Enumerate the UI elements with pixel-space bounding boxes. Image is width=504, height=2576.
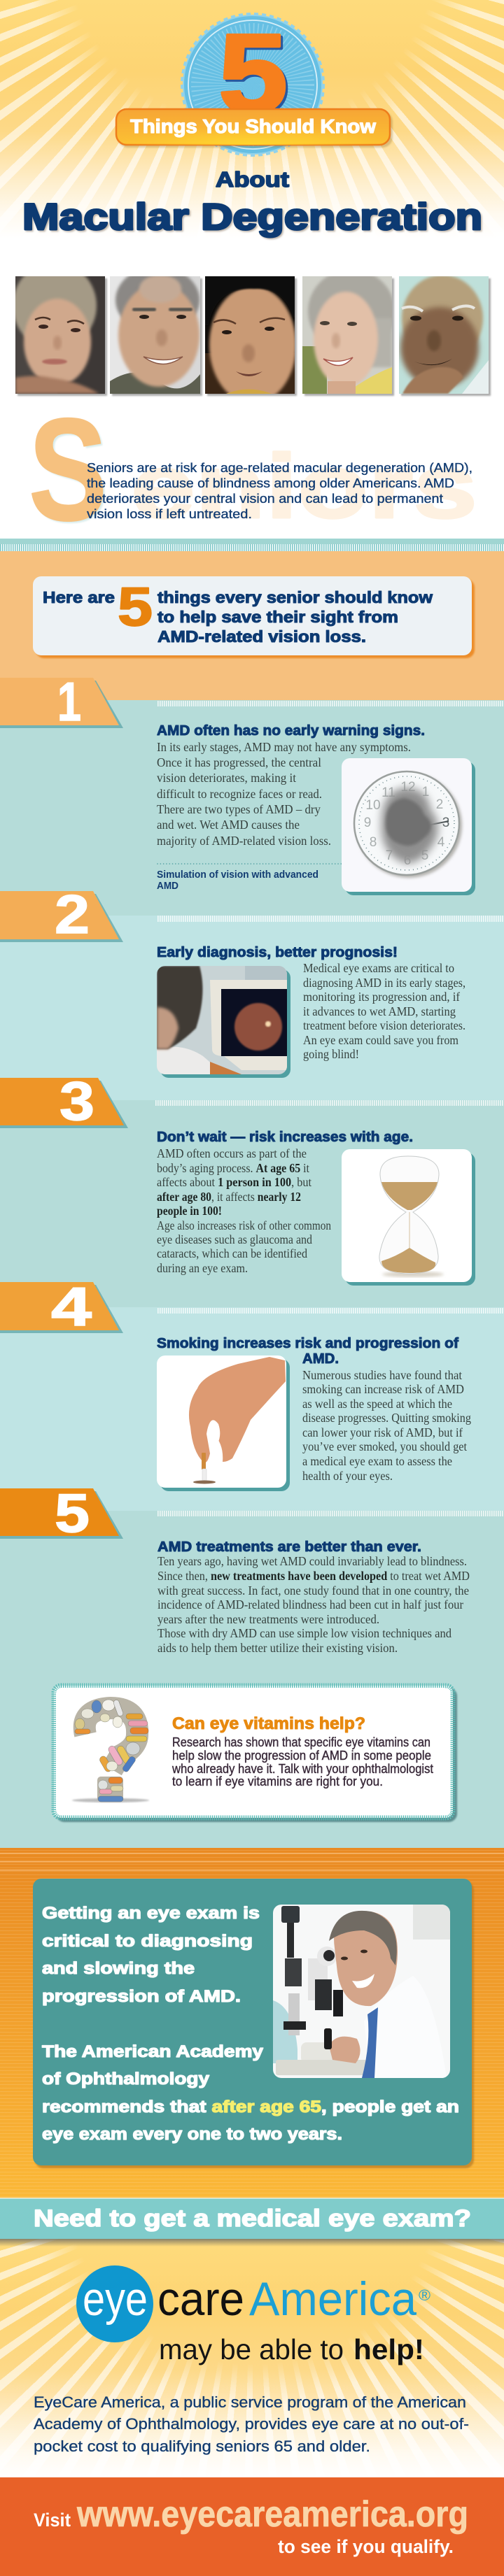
section 3: body: cataracts, which can be identified [157,1246,307,1260]
section 5: body: incidence of AMD-related blindness had been cut in half just four [158,1597,463,1611]
vitamins body [172,1735,433,1788]
eyecare description [34,2393,469,2455]
panel: teal exam card: and slowing the [42,1959,195,1978]
section 3: body: eye diseases such as glaucoma and [157,1232,312,1246]
title: macular degeneration: Macular Degeneration [24,198,484,239]
section 4: body: you’ve ever smoked, you should get [302,1439,467,1453]
big number 5: 5 [218,10,288,136]
image: clock with central vision loss [342,758,475,895]
section 4: body [302,1368,471,1483]
big number 5: 5 [220,13,290,138]
section 4: body: a medical eye exam to assess the [302,1454,452,1468]
section 2: body: treatment before vision deteriorates. [303,1018,465,1032]
section 2 tab: 2 [55,883,90,945]
section 5: body: Since then, new treatments have been developed to treat wet AMD [158,1569,470,1583]
vitamins body: to learn if eye vitamins are right for you. [172,1774,383,1788]
logo: eyecare america [76,2265,430,2342]
intro text: deteriorates your central vision and can lead to permanent [87,492,443,506]
image: eye doctor with slit lamp [273,1905,450,2078]
logo: eyecare america: America [249,2272,416,2326]
callout: here are 5 things: things every senior should know [158,588,433,606]
panel: footer visit website: www.eyecareamerica.org [76,2494,468,2535]
badge: blue seal [183,15,323,155]
section 1: body: and wet. Wet AMD causes the [157,818,300,832]
seniors watermark: S [31,391,109,553]
section 5: body: Ten years ago, having wet AMD could invariably lead to blindness. [158,1554,467,1568]
intro text: vision loss if left untreated. [87,507,252,521]
section 3: body: AMD often occurs as part of the [157,1146,307,1160]
banner: need a medical eye exam [0,2198,504,2247]
image: clock with central vision loss: 9 [364,816,371,830]
section 1: body: Once it has progressed, the central [157,755,321,769]
seniors watermark: eniors [131,435,477,537]
eyecare description: pocket cost to qualifying seniors 65 and older. [34,2438,370,2455]
section 3: body: body’s aging process. At age 65 it [157,1161,309,1175]
image: clock with central vision loss: 11 [382,785,396,800]
section 5: heading: AMD treatments are better than ever. [158,1539,421,1555]
photo: older woman with dark hair [205,276,297,404]
photo: smiling man [110,266,202,396]
intro text: Seniors are at risk for age-related macular degeneration (AMD), [87,461,472,475]
section 4: body: Numerous studies have found that [302,1368,462,1382]
section 4: body: disease progresses. Quitting smoking [302,1411,471,1425]
section 2: body: Medical eye exams are critical to [303,961,454,975]
section 2 tab [0,883,123,945]
seniors watermark [29,389,477,553]
image: hourglass [342,1149,475,1286]
panel: teal exam card: critical to diagnosing [42,1932,253,1951]
panel: footer visit website: Visit [34,2510,71,2531]
image: clock with central vision loss: 5 [421,848,428,863]
image: clock with central vision loss: 3 [442,816,449,830]
section 1: body: In its early stages, AMD may not have any symptoms. [157,740,411,754]
panel: footer visit website: to see if you qualify. [278,2536,454,2557]
logo: eyecare america: eye [83,2272,148,2326]
panel: teal exam card: The American Academy [42,2042,264,2061]
section 4: heading [157,1336,458,1367]
vitamins body: Research has shown that specific eye vitamins can [172,1735,430,1749]
panel: teal exam card [33,1879,474,2168]
callout: here are 5 things: AMD-related vision loss. [158,627,366,646]
section 2: body [303,961,465,1061]
tagline: may be able to help: help! [354,2333,424,2365]
section 4: body: can lower your risk of AMD, but if [302,1425,463,1439]
logo: eyecare america: care [158,2272,244,2326]
vitamins body: help slow the progression of AMD in some people [172,1749,431,1763]
banner: need a medical eye exam: Need to get a medical eye exam? [34,2205,471,2232]
section 1: caption: AMD [157,880,178,892]
section 4: body: health of your eyes. [302,1469,393,1483]
intro text: the leading cause of blindness among older Americans. AMD [87,476,454,490]
section 1: caption: Simulation of vision with advanced [157,869,318,881]
image: clock with central vision loss: 8 [370,835,377,850]
logo: eyecare america: ® [419,2286,430,2304]
section 1: body: majority of AMD-related vision loss. [157,834,331,848]
section 5: body: with great success. In fact, one study found that in one country, the [158,1584,469,1597]
title: macular degeneration: Macular Degeneration [22,197,482,238]
eyecare description: Academy of Ophthalmology, provides eye care at no out-of- [34,2415,469,2433]
vitamins body: who already have it. Talk with your ophthalmologist [172,1762,433,1776]
section 2: body: it advances to wet AMD, starting [303,1004,456,1018]
section 3: body: during an eye exam. [157,1261,248,1275]
panel: teal exam card: recommends that after age 65 , people get an [42,2098,459,2116]
section 4: heading: AMD. [302,1351,339,1367]
section 1 tab: 1 [57,671,81,732]
panel: orange intro [0,539,504,701]
panel: orange exam section [0,1848,504,2198]
section 5 tab [0,1482,123,1544]
section 5: body: aids to help them better utilize their existing vision. [158,1641,398,1655]
section 1: body: vision deteriorates, making it [157,771,296,785]
section 4: body: smoking can increase risk of AMD [302,1382,464,1396]
seniors watermark: S [29,389,107,551]
section 3 tab [0,1070,128,1132]
section 1: body: There are two types of AMD – dry [157,802,321,816]
section 3: body: after age 80, it affects nearly 12 [157,1190,301,1204]
image: clock with central vision loss: 1 [422,785,429,799]
section 5: body [158,1554,470,1655]
panel: teal exam card: eye exam every one to two years. [42,2125,342,2144]
image: hand putting out cigarette [157,1355,290,1491]
section 5 tab: 5 [55,1482,90,1544]
section 4: heading: Smoking increases risk and progression of [157,1336,458,1351]
section 2: body: monitoring its progression and, if [303,990,460,1004]
section 1: caption [157,864,342,892]
image: clock with central vision loss: 12 [400,780,416,795]
panel: footer visit website [0,2477,504,2576]
vitamins heading: Can eye vitamins help? [172,1714,365,1733]
section 2: body: An eye exam could save you from [303,1033,458,1047]
section 3: heading: Don’t wait — risk increases with age. [157,1130,413,1145]
callout: here are 5 things: Here are [43,588,115,606]
callout: here are 5 things [33,576,475,658]
photo: older man [399,275,491,396]
section 3: body: affects about 1 person in 100, but [157,1175,312,1189]
section backgrounds [0,700,504,1848]
section 4 tab: 4 [51,1276,92,1337]
section 1: body: difficult to recognize faces or read. [157,787,322,801]
callout: here are 5 things: to help save their sight from [158,608,398,626]
section 1: body [157,740,411,848]
banner: things you should know [116,109,393,148]
section 5: body: years after the new treatments were introduced. [158,1612,379,1626]
photo: woman in yellow [302,269,395,396]
image: clock with central vision loss: 6 [404,853,411,868]
section 3: body: Age also increases risk of other common [157,1218,331,1232]
section 1 tab [0,671,123,732]
panel: teal exam card: of Ophthalmology [42,2070,210,2088]
title: about: About [216,167,289,192]
eyecare description: EyeCare America, a public service program of the American [34,2393,466,2411]
section 3: body [157,1146,331,1275]
intro text [87,461,472,521]
tagline: may be able to help: may be able to [159,2333,344,2365]
banner: things you should know: Things You Should Know [130,115,376,137]
image: clock with central vision loss: 2 [436,797,443,812]
panel: teal exam card: Getting an eye exam is [42,1904,260,1923]
section 2: heading: Early diagnosis, better prognosis! [157,945,398,960]
image: clock with central vision loss: 7 [386,848,393,863]
section 4: body: as well as the speed at which the [302,1397,452,1411]
image: doctor viewing retina scan [157,966,290,1078]
image: clock with central vision loss: 10 [365,798,381,813]
callout: here are 5 things: 5 [118,576,153,637]
callout: can eye vitamins help [54,1686,457,1822]
image: clock with central vision loss: 4 [438,835,445,850]
section 1: heading: AMD often has no early warning signs. [157,723,425,739]
icon: question mark of pills [72,1699,149,1802]
section 5: body: Those with dry AMD can use simple low vision techniques and [158,1626,451,1640]
section 3: body: people in 100! [157,1204,222,1218]
panel: teal exam card: progression of AMD. [42,1987,241,2006]
section 3 tab: 3 [59,1070,94,1132]
section 2: body: going blind! [303,1047,359,1061]
section 2: body: diagnosing AMD in its early stages, [303,976,465,990]
photo: woman with grey hair [13,262,107,396]
section 4 tab [0,1276,123,1337]
